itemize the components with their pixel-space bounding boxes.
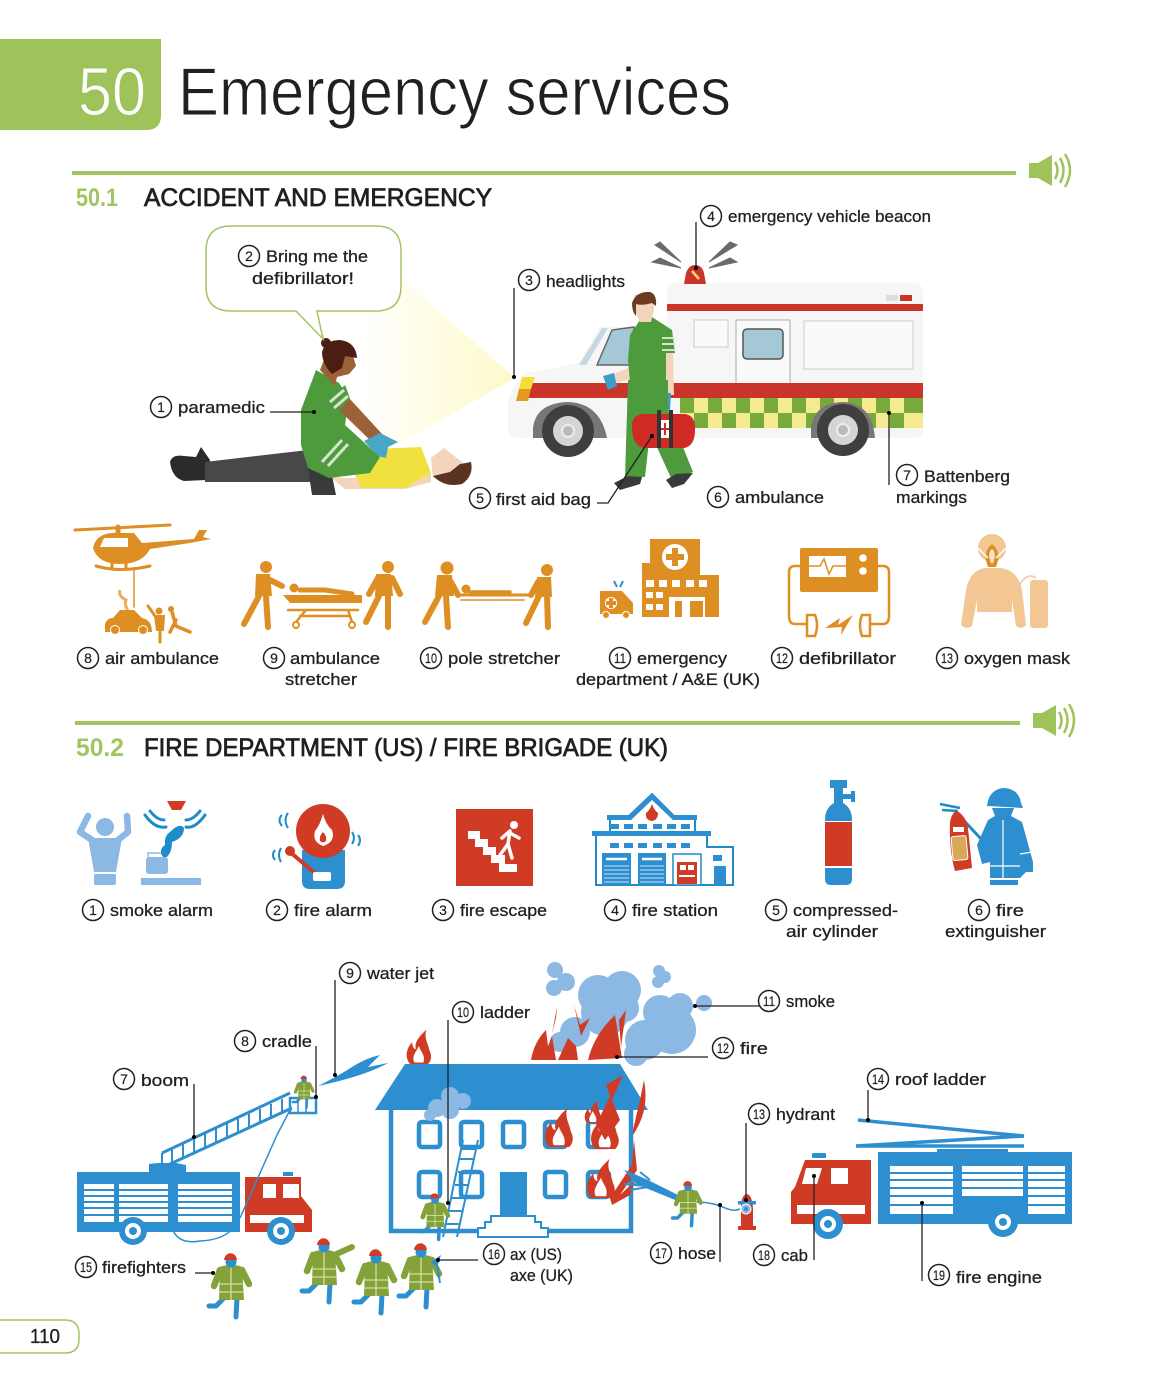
label 3 headlights: [512, 270, 625, 379]
speech bubble: 2: [245, 248, 253, 264]
label 13 oxygen mask: oxygen mask: [964, 649, 1071, 668]
label 11 emergency department: [576, 648, 760, 689]
section heading 50.2: FIRE DEPARTMENT (US) / FIRE BRIGADE (UK): [144, 734, 668, 762]
label 16 ax axe: [436, 1244, 573, 1285]
label 12 fire: fire: [740, 1039, 768, 1058]
label 8 air ambulance: air ambulance: [105, 649, 219, 668]
label 5 first aid bag: first aid bag: [496, 490, 591, 509]
label 13 oxygen mask: [936, 648, 1071, 668]
label 7 Battenberg markings: 7: [903, 467, 911, 483]
label 11 emergency department: emergency: [637, 649, 728, 668]
label 6 ambulance: [708, 486, 824, 508]
label 6 ambulance: 6: [714, 489, 722, 505]
label 1 smoke alarm: 1: [89, 902, 97, 918]
icon: compressed-air cylinder: [825, 780, 855, 885]
illustration: smoke: [546, 962, 712, 1066]
label 18 cab: 18: [758, 1247, 770, 1263]
label 7 Battenberg markings: [887, 411, 1010, 507]
label 10 ladder: 10: [457, 1004, 469, 1020]
label 13 hydrant: [744, 1104, 835, 1202]
illustration: kneeling paramedic: [301, 338, 398, 478]
icon: smoke alarm: [80, 801, 205, 885]
label 16 ax axe: ax (US): [510, 1245, 562, 1264]
label 6 ambulance: ambulance: [735, 488, 824, 507]
label 7 Battenberg markings: markings: [896, 488, 967, 507]
label 17 hose: 17: [655, 1245, 667, 1261]
label 10 pole stretcher: pole stretcher: [448, 649, 560, 668]
icon: fire escape: [456, 809, 533, 886]
icon: fire extinguisher: [940, 788, 1033, 885]
speech bubble: defibrillator!: [252, 269, 354, 288]
label 9 ambulance stretcher: ambulance: [290, 649, 380, 668]
label 9 ambulance stretcher: stretcher: [285, 670, 357, 689]
label 4 emergency vehicle beacon: 4: [707, 208, 715, 224]
label 1 paramedic: paramedic: [178, 398, 266, 417]
label 4 emergency vehicle beacon: emergency vehicle beacon: [728, 207, 931, 226]
label 16 ax axe: 16: [488, 1246, 500, 1262]
page number: [0, 1320, 79, 1353]
label 7 Battenberg markings: Battenberg: [924, 467, 1010, 486]
label 5 first aid bag: [470, 434, 654, 509]
illustration: ambulance: [508, 283, 923, 457]
label 4 fire station: [604, 900, 718, 920]
icon: air ambulance: [75, 525, 211, 642]
label 11 smoke: 11: [763, 993, 775, 1009]
label 2 fire alarm: [266, 900, 372, 920]
label 3 headlights: 3: [525, 272, 533, 288]
label 7 boom: 7: [120, 1071, 128, 1087]
label 16 ax axe: axe (UK): [510, 1266, 573, 1285]
label 17 hose: [650, 1203, 722, 1264]
label 8 cradle: 8: [241, 1033, 249, 1049]
label 12 defibrillator: defibrillator: [799, 649, 896, 668]
icon: fire station: [592, 793, 733, 885]
section heading 50.1: 50.1: [76, 184, 118, 212]
label 9 ambulance stretcher: [264, 648, 380, 689]
section heading 50.1: [72, 171, 1016, 212]
title: Emergency services: [178, 54, 731, 130]
label 6 fire extinguisher: fire: [996, 901, 1024, 920]
icon: emergency department: [600, 539, 719, 618]
label 11 emergency department: department / A&E (UK): [576, 670, 760, 689]
label 18 cab: cab: [781, 1246, 808, 1265]
label 6 fire extinguisher: [945, 900, 1046, 941]
label 3 fire escape: [432, 900, 547, 920]
illustration: right fire engine: [791, 1120, 1072, 1239]
icon: first aid bag: [632, 410, 695, 448]
label 12 defibrillator: 12: [776, 650, 788, 666]
label 10 ladder: ladder: [480, 1003, 530, 1022]
icon: audio speaker 2: [1033, 704, 1074, 737]
label 12 fire: 12: [717, 1040, 729, 1056]
illustration: boom and cradle: [162, 1076, 316, 1168]
label 10 ladder: [446, 1002, 530, 1205]
chapter number tab: [0, 39, 161, 130]
label 15 firefighters: 15: [80, 1259, 92, 1275]
label 19 fire engine: fire engine: [956, 1268, 1042, 1287]
label 8 cradle: [234, 1030, 318, 1099]
page number: 110: [30, 1326, 60, 1348]
section heading 50.2: 50.2: [76, 734, 124, 762]
label 2 fire alarm: 2: [273, 902, 281, 918]
illustration: standing paramedic: [603, 292, 693, 490]
label 12 defibrillator: [772, 648, 896, 668]
label 3 fire escape: fire escape: [460, 901, 547, 920]
icon: oxygen mask: [961, 534, 1048, 628]
label 11 smoke: smoke: [786, 992, 835, 1011]
label 5 compressed-air cylinder: air cylinder: [786, 922, 878, 941]
icon: ambulance stretcher: [244, 561, 400, 628]
label 9 ambulance stretcher: 9: [270, 650, 278, 666]
label 5 compressed-air cylinder: compressed-: [793, 901, 898, 920]
label 5 first aid bag: 5: [476, 490, 484, 506]
illustration: left fire engine: [77, 1110, 312, 1245]
label 18 cab: [754, 1174, 816, 1266]
label 1 paramedic: [150, 396, 316, 418]
label 4 fire station: fire station: [632, 901, 718, 920]
illustration: water jet: [318, 1055, 388, 1086]
label 1 smoke alarm: smoke alarm: [110, 901, 213, 920]
label 6 fire extinguisher: extinguisher: [945, 922, 1046, 941]
label 1 paramedic: 1: [157, 399, 165, 415]
label 6 fire extinguisher: 6: [975, 902, 983, 918]
label 11 emergency department: 11: [614, 650, 626, 666]
label 13 hydrant: 13: [753, 1106, 765, 1122]
section heading 50.2: [75, 721, 1020, 762]
label 8 air ambulance: [78, 648, 219, 668]
label 8 air ambulance: 8: [84, 650, 92, 666]
label 19 fire engine: [920, 1201, 1042, 1287]
illustration: hose and hydrant: [624, 1170, 756, 1230]
label 9 water jet: water jet: [366, 964, 434, 983]
illustration: fire on building: [407, 1005, 646, 1205]
speech bubble: Bring me the: [266, 247, 368, 266]
label 15 firefighters: [76, 1256, 215, 1278]
icon: defibrillator: [789, 548, 889, 636]
label 15 firefighters: firefighters: [102, 1258, 186, 1277]
label 7 boom: boom: [141, 1071, 189, 1090]
label 5 compressed-air cylinder: [766, 900, 898, 941]
label 9 water jet: 9: [346, 965, 354, 981]
illustration: light cone: [360, 278, 515, 452]
label 17 hose: hose: [678, 1244, 716, 1263]
label 3 fire escape: 3: [439, 902, 447, 918]
label 9 water jet: [333, 962, 434, 1077]
label 10 pole stretcher: 10: [425, 650, 437, 666]
label 3 headlights: headlights: [546, 272, 625, 291]
chapter number tab: 50: [78, 54, 146, 130]
label 11 smoke: [693, 990, 835, 1012]
label 12 fire: [615, 1038, 768, 1059]
icon: pole stretcher: [425, 562, 553, 627]
section heading 50.1: ACCIDENT AND EMERGENCY: [144, 184, 492, 212]
icon: audio speaker 1: [1029, 154, 1070, 187]
label 13 oxygen mask: 13: [941, 650, 953, 666]
label 2 fire alarm: fire alarm: [294, 901, 372, 920]
label 7 boom: [114, 1068, 196, 1139]
label 14 roof ladder: 14: [872, 1071, 884, 1087]
label 19 fire engine: 19: [933, 1267, 945, 1283]
illustration: building: [375, 1064, 648, 1237]
label 4 emergency vehicle beacon: [694, 206, 931, 270]
label 14 roof ladder: [866, 1068, 986, 1122]
label 13 hydrant: hydrant: [776, 1105, 835, 1124]
illustration: firefighters group: [209, 1193, 448, 1317]
illustration: patient on ground: [170, 447, 472, 495]
speech bubble: [206, 226, 401, 339]
label 10 pole stretcher: [420, 648, 560, 668]
label 1 smoke alarm: [82, 900, 213, 920]
label 4 fire station: 4: [611, 902, 619, 918]
label 5 compressed-air cylinder: 5: [772, 902, 780, 918]
icon: fire alarm: [273, 804, 360, 889]
icon: emergency beacon: [652, 242, 737, 284]
label 8 cradle: cradle: [262, 1032, 312, 1051]
label 14 roof ladder: roof ladder: [895, 1070, 986, 1089]
